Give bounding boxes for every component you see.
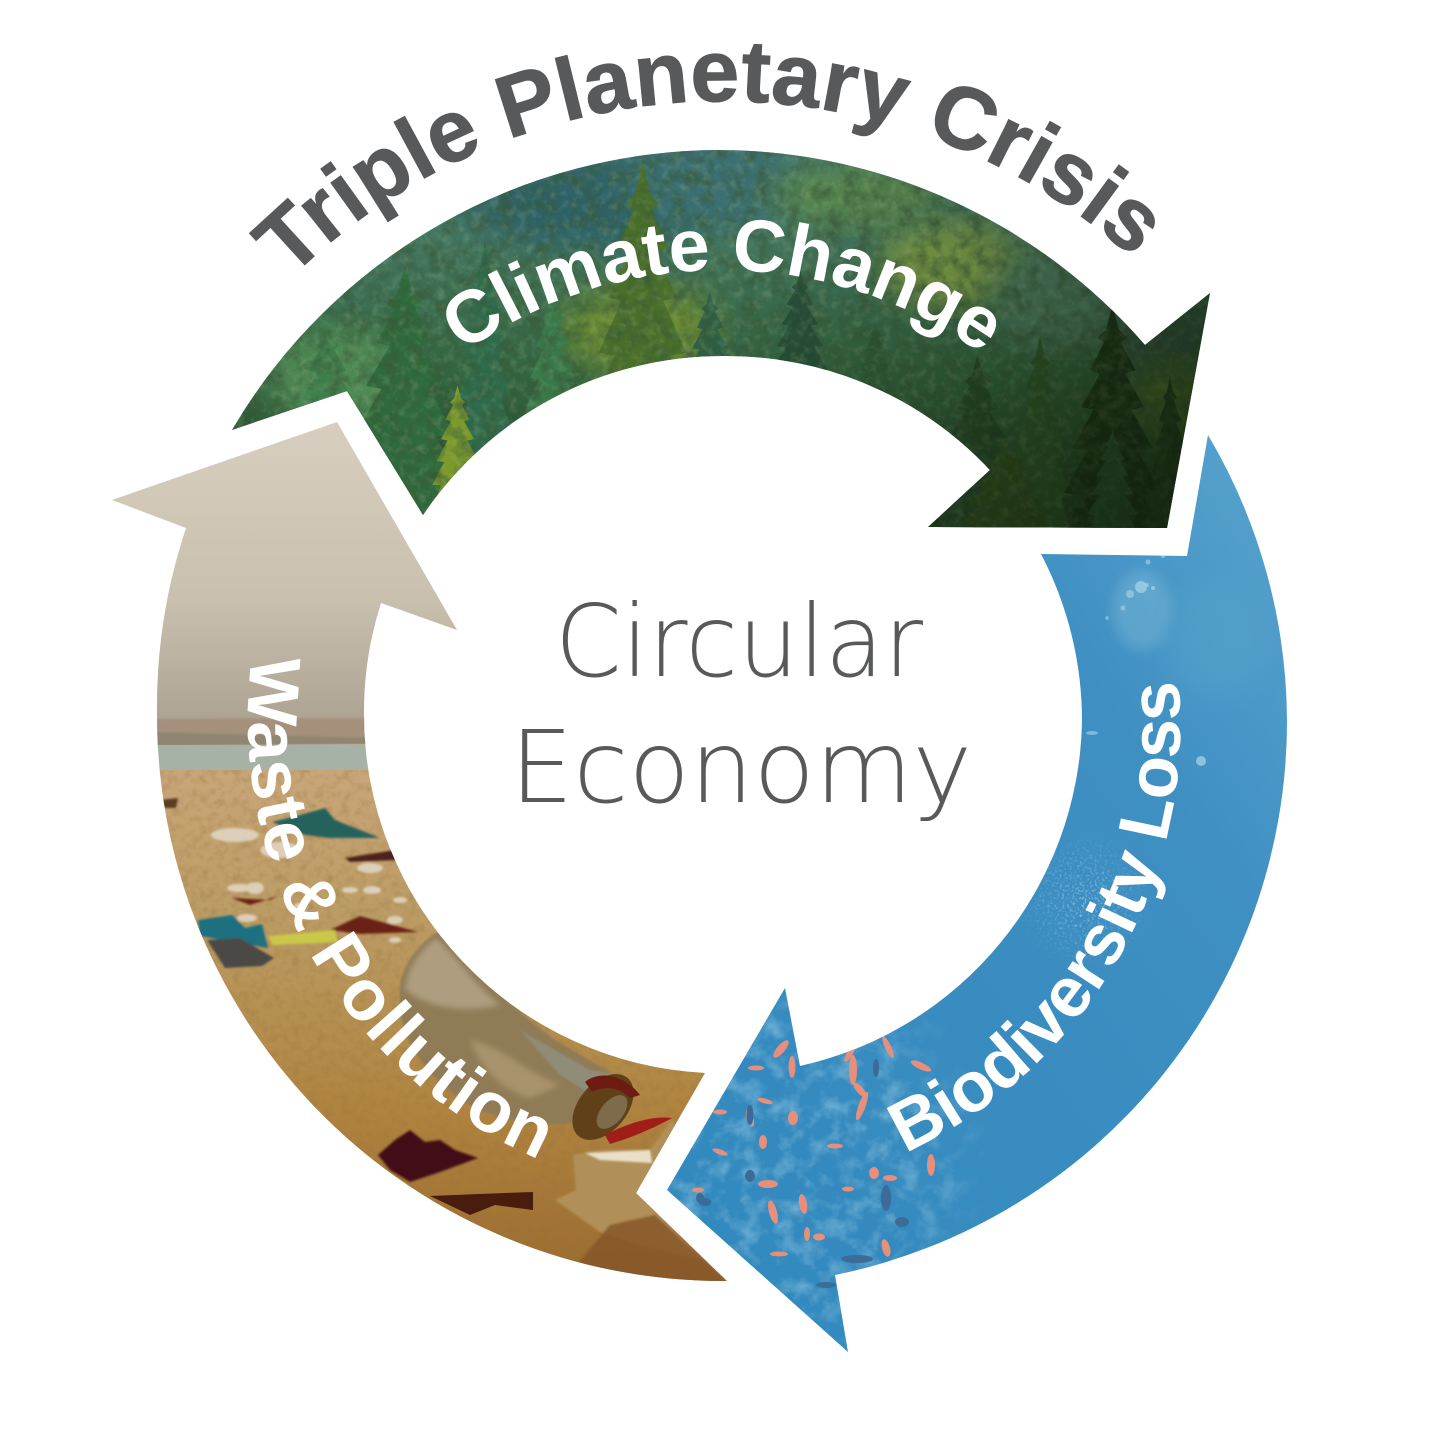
misty and yellow-green forest patches <box>270 150 1210 440</box>
bubbles and diver <box>1086 556 1206 766</box>
label: Waste & Pollution: Waste & Pollution <box>248 658 548 1158</box>
sand <box>150 770 750 1290</box>
center heading: Circular Economy: Circular <box>555 583 924 700</box>
label: Climate Change: Climate Change <box>446 220 996 348</box>
glass bottle <box>400 932 672 1152</box>
coral reef texture <box>667 998 976 1351</box>
seaweed, stone and sand mound <box>378 1120 730 1285</box>
arrow panel: waste and pollution beach photo <box>100 410 750 1290</box>
arrow panel: biodiversity loss underwater photo <box>667 435 1287 1352</box>
foam of rising bubbles <box>1026 840 1148 961</box>
fish school <box>692 1035 935 1258</box>
dark fish <box>696 1059 909 1288</box>
far shore <box>150 718 370 746</box>
sky <box>112 422 457 722</box>
beach debris <box>160 798 418 968</box>
title: Triple Planetary Crisis: Triple Planetary Crisis <box>248 44 1155 266</box>
label: Biodiversity Loss: Biodiversity Loss <box>886 684 1181 1152</box>
center heading: Circular Economy: Economy <box>510 709 972 826</box>
sea <box>150 745 380 771</box>
conifer trees <box>285 160 1195 555</box>
center heading: Circular Economy <box>510 583 972 826</box>
arrow panel: climate change forest photo <box>232 150 1210 528</box>
